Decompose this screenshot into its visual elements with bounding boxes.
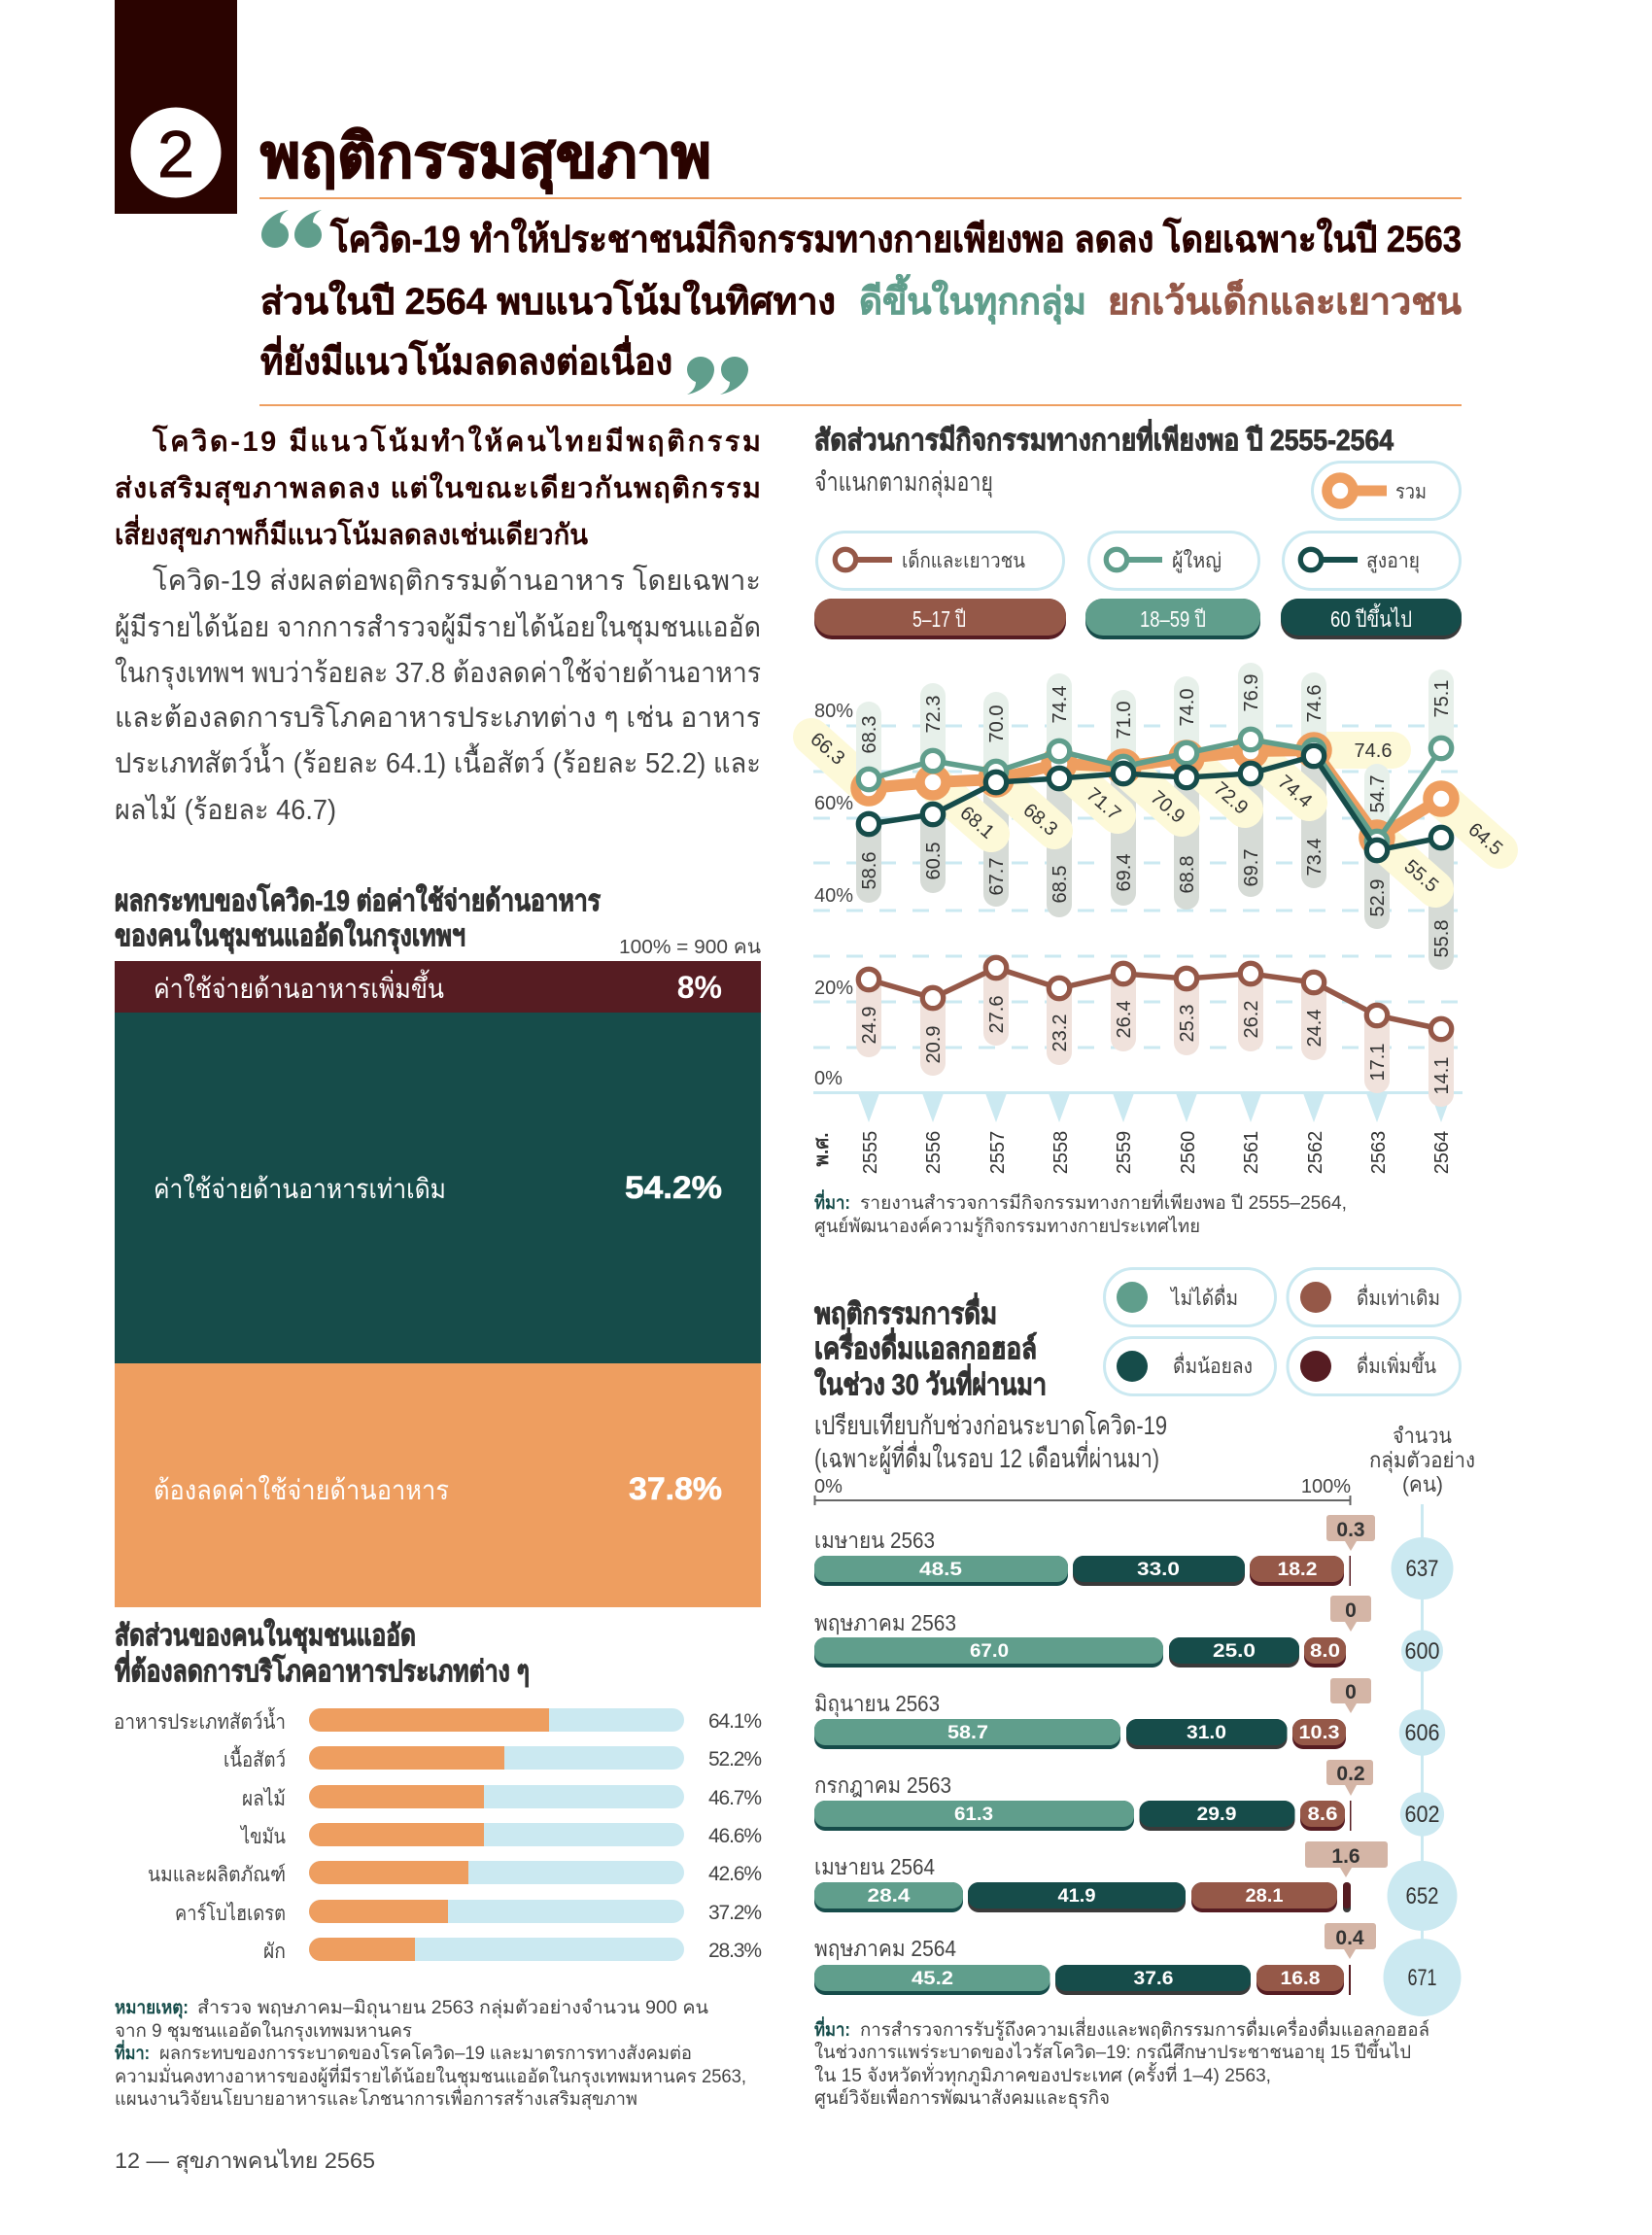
legend: adults — [1088, 533, 1259, 589]
row: May 2564: 45.2 — [912, 1969, 953, 1989]
total value capsules — [811, 737, 1499, 889]
row: April 2564: 652 — [1405, 1883, 1438, 1909]
notes and source: left column: ที่มา: — [115, 2040, 150, 2064]
row: June 2563: มิถุนายน 2563 — [814, 1691, 940, 1717]
x axis year labels: 2555 — [860, 1131, 881, 1174]
heading: food expense impact: ของคนในชุมชนแออัดในกรุงเทพฯ — [115, 918, 465, 954]
children values — [859, 996, 1453, 1094]
adult values: 74.6 — [1304, 685, 1325, 722]
subheading: comparison: (เฉพาะผู้ที่ดื่มในรอบ 12 เดือนที่ผ่านมา) — [814, 1440, 1159, 1474]
row: May 2563: พฤษภาคม 2563 — [814, 1610, 956, 1635]
subheading: comparison: เปรียบเทียบกับช่วงก่อนระบาดโควิด-19 — [814, 1411, 1167, 1440]
heading: alcohol behaviour: เครื่องดื่มแอลกอฮอล์ — [814, 1327, 1037, 1365]
x axis year labels: พ.ศ. — [811, 1133, 833, 1166]
x axis year labels: 2559 — [1114, 1131, 1135, 1174]
elderly values: 68.8 — [1177, 856, 1198, 893]
total values: 64.5 — [1463, 819, 1506, 860]
x axis year labels: 2558 — [1050, 1131, 1072, 1174]
block: increased 8%: ค่าใช้จ่ายด้านอาหารเพิ่มขึ้น — [154, 969, 444, 1004]
adult values: 76.9 — [1241, 674, 1262, 711]
block: same 54.2%: ค่าใช้จ่ายด้านอาหารเท่าเดิม — [154, 1173, 446, 1204]
row: July 2563: กรกฎาคม 2563 — [814, 1772, 951, 1798]
row: fat: ไขมัน — [239, 1825, 286, 1848]
heading: alcohol behaviour — [814, 1292, 1047, 1401]
sample size header: จำนวน — [1393, 1424, 1452, 1448]
legend: total: รวม — [1395, 481, 1427, 503]
row: May 2563: 67.0 — [970, 1641, 1009, 1662]
body paragraph: โควิด-19 ส่งผลต่อพฤติกรรมด้านอาหาร โดยเฉพาะ — [153, 564, 761, 597]
percent scale axis: 100% — [1301, 1476, 1351, 1497]
notes and source: left column — [115, 1998, 746, 2111]
row: June 2563: 606 — [1405, 1720, 1440, 1746]
heading: alcohol behaviour: ในช่วง 30 วันที่ผ่านมา — [814, 1363, 1047, 1401]
row: dairy: 42.6% — [708, 1863, 762, 1885]
total values — [806, 729, 1506, 897]
children values: 23.2 — [1050, 1014, 1071, 1051]
legend: drinking more — [1288, 1337, 1460, 1395]
row: fruit: ผลไม้ — [242, 1787, 286, 1810]
row: June 2563: 10.3 — [1298, 1723, 1339, 1743]
row: July 2563 — [814, 1760, 1444, 1837]
children values: 14.1 — [1431, 1057, 1453, 1094]
row: fat — [239, 1823, 762, 1848]
legend: not drinking — [1104, 1269, 1275, 1325]
row: seafood — [114, 1707, 762, 1734]
age pill: 5-17: 5–17 ปี — [912, 606, 966, 632]
row: May 2564 — [814, 1923, 1462, 2016]
icon: closing quote mark — [687, 357, 748, 395]
legend: drinking less: ดื่มน้อยลง — [1173, 1352, 1253, 1378]
percent scale axis — [814, 1476, 1351, 1505]
adult value capsules — [869, 675, 1441, 842]
row: carbohydrate — [175, 1900, 762, 1925]
children values: 24.4 — [1304, 1010, 1325, 1047]
heading: food expense impact — [115, 882, 601, 954]
heading: physical activity: สัดส่วนการมีกิจกรรมทางกายที่เพียงพอ ปี 2555-2564 — [814, 419, 1394, 457]
row: April 2564: เมษายน 2564 — [814, 1854, 935, 1879]
row: meat: 52.2% — [708, 1748, 762, 1771]
adult values: 54.7 — [1367, 775, 1389, 812]
pull quote: ที่ยังมีแนวโน้มลดลงต่อเนื่อง — [260, 335, 672, 383]
notes and source: left column: ความมั่นคงทางอาหารของผู้ที่มีรายได้น้อยในชุมชนแออัดในกรุงเทพมหานคร 2563, — [115, 2063, 746, 2088]
body paragraph — [115, 564, 761, 826]
row: May 2564: 0.4 — [1335, 1927, 1364, 1949]
row: April 2563: 48.5 — [919, 1560, 963, 1580]
elderly values: 68.5 — [1050, 866, 1071, 903]
row: April 2563: 18.2 — [1277, 1560, 1318, 1580]
percent scale axis: 0% — [814, 1476, 843, 1497]
heading: food types — [115, 1618, 530, 1688]
y axis labels: 0% — [814, 1068, 843, 1089]
total values: 55.5 — [1399, 856, 1442, 897]
children values: 17.1 — [1367, 1044, 1389, 1081]
legend: elderly — [1283, 533, 1460, 589]
row: seafood: 64.1% — [708, 1710, 762, 1733]
intro bold paragraph: เสี่ยงสุขภาพก็มีแนวโน้มลดลงเช่นเดียวกัน — [115, 514, 588, 552]
source: physical activity: ที่มา: — [814, 1189, 850, 1214]
legend: children and youth — [816, 533, 1063, 589]
row: vegetables — [263, 1938, 762, 1963]
block: same 54.2% — [115, 1013, 761, 1363]
total values: 68.1 — [955, 803, 998, 843]
adult values: 70.0 — [986, 705, 1008, 742]
header: section number tab: 2 — [157, 118, 194, 191]
source: alcohol: ในช่วงการแพร่ระบาดของไวรัสโควิด–19: กรณีศึกษาประชาชนอายุ 15 ปีขึ้นไป — [814, 2039, 1411, 2064]
row: May 2564: 37.6 — [1133, 1969, 1174, 1989]
block: reduced 37.8%: ต้องลดค่าใช้จ่ายด้านอาหาร — [154, 1474, 449, 1505]
total values: 68.3 — [1018, 800, 1061, 841]
row: June 2563 — [814, 1678, 1445, 1756]
sample size header: (คน) — [1402, 1472, 1443, 1496]
row: April 2564: 41.9 — [1057, 1886, 1096, 1907]
line: elderly — [858, 745, 1452, 861]
row: July 2563: 61.3 — [954, 1805, 993, 1825]
source: alcohol: การสำรวจการรับรู้ถึงความเสี่ยงและพฤติกรรมการดื่มเครื่องดื่มแอลกอฮอล์ — [860, 2016, 1429, 2041]
row: July 2563: 29.9 — [1197, 1805, 1236, 1825]
row: fat: 46.6% — [708, 1825, 762, 1847]
legend: same drinking: ดื่มเท่าเดิม — [1357, 1284, 1440, 1310]
heading: food types: ที่ต้องลดการบริโภคอาหารประเภทต่าง ๆ — [115, 1650, 530, 1688]
row: May 2564: 16.8 — [1281, 1969, 1320, 1989]
x axis year labels: 2563 — [1368, 1131, 1390, 1174]
sample size header: กลุ่มตัวอย่าง — [1369, 1448, 1475, 1473]
row: dairy: นมและผลิตภัณฑ์ — [148, 1863, 286, 1886]
adult values — [859, 674, 1453, 812]
intro bold paragraph — [115, 424, 761, 552]
row: May 2563: 25.0 — [1213, 1641, 1256, 1662]
total values: 74.4 — [1273, 772, 1316, 812]
total values: 71.7 — [1082, 784, 1124, 825]
x axis line and ticks — [813, 1091, 1463, 1122]
block: increased 8%: 8% — [677, 970, 722, 1005]
row: April 2563: 637 — [1405, 1556, 1438, 1582]
row: meat — [224, 1745, 762, 1771]
row: carbohydrate: คาร์โบไฮเดรต — [175, 1902, 286, 1925]
total values: 74.6 — [1355, 740, 1392, 762]
notes and source: left column: สำรวจ พฤษภาคม–มิถุนายน 2563 กลุ่มตัวอย่างจำนวน 900 คน — [197, 1998, 708, 2019]
source: alcohol: ที่มา: — [814, 2016, 850, 2041]
total values: 70.9 — [1146, 787, 1188, 828]
row: July 2563: 602 — [1405, 1802, 1440, 1828]
y axis labels: 60% — [814, 793, 853, 814]
body paragraph: ประเภทสัตว์น้ำ (ร้อยละ 64.1) เนื้อสัตว์ (ร้อยละ 52.2) และ — [115, 742, 761, 779]
sample size connector — [1421, 1504, 1424, 1943]
row: April 2564: 1.6 — [1331, 1845, 1360, 1868]
row: vegetables: 28.3% — [708, 1940, 762, 1962]
sample size header — [1369, 1424, 1475, 1496]
legend: children and youth: เด็กและเยาวชน — [902, 547, 1025, 572]
x axis year labels: 2561 — [1241, 1131, 1262, 1174]
row: June 2563: 0 — [1345, 1681, 1357, 1703]
x axis year labels — [811, 1131, 1453, 1174]
notes and source: left column: หมายเหตุ: — [115, 1998, 189, 2019]
x axis year labels: 2557 — [987, 1131, 1009, 1174]
header: section number tab — [115, 0, 237, 214]
elderly value capsules — [869, 756, 1441, 957]
heading: alcohol behaviour: พฤติกรรมการดื่ม — [814, 1292, 997, 1330]
pull quote: ส่วนในปี 2564 พบแนวโน้มในทิศทาง — [260, 279, 836, 323]
page footer: 12 — สุขภาพคนไทย 2565 — [115, 2149, 375, 2174]
title: พฤติกรรมสุขภาพ — [260, 123, 711, 193]
row: April 2563: 0.3 — [1336, 1519, 1365, 1541]
total values: 66.3 — [806, 729, 848, 770]
row: April 2563: เมษายน 2563 — [814, 1528, 935, 1553]
block: increased 8% — [115, 961, 761, 1013]
y axis labels — [814, 701, 853, 1089]
scale note: 100% = 900 คน — [619, 937, 761, 958]
source: physical activity — [814, 1189, 1347, 1237]
source: alcohol: ศูนย์วิจัยเพื่อการพัฒนาสังคมและธุรกิจ — [814, 2084, 1110, 2110]
elderly values: 69.4 — [1114, 854, 1135, 891]
icon: opening quote mark — [261, 210, 322, 248]
children values: 25.3 — [1177, 1005, 1198, 1042]
adult values: 74.4 — [1050, 686, 1071, 723]
block: reduced 37.8%: 37.8% — [629, 1471, 722, 1506]
elderly values: 60.5 — [923, 842, 945, 879]
chart: alcohol stacked bars — [814, 1515, 1462, 2016]
row: April 2564 — [814, 1841, 1458, 1931]
row: May 2563 — [814, 1596, 1443, 1671]
row: fruit — [242, 1785, 762, 1810]
children values: 24.9 — [859, 1007, 880, 1044]
age pill: 60+: 60 ปีขึ้นไป — [1330, 603, 1412, 632]
elderly values: 55.8 — [1431, 920, 1453, 957]
elderly values: 58.6 — [859, 852, 880, 889]
intro bold paragraph: ส่งเสริมสุขภาพลดลง แต่ในขณะเดียวกันพฤติกรรม — [115, 471, 761, 505]
children value capsules — [869, 968, 1441, 1094]
block: reduced 37.8% — [115, 1363, 761, 1607]
notes and source: left column: จาก 9 ชุมชนแออัดในกรุงเทพมหานคร — [115, 2020, 412, 2043]
elderly values: 67.7 — [986, 858, 1008, 895]
age pill: 60+ — [1281, 599, 1462, 639]
chart: stacked food expense blocks — [115, 961, 761, 1607]
row: July 2563: 8.6 — [1308, 1805, 1337, 1825]
block: same 54.2%: 54.2% — [625, 1170, 722, 1205]
row: June 2563: 58.7 — [947, 1723, 988, 1743]
legend: total — [1312, 463, 1460, 519]
children values: 20.9 — [923, 1026, 945, 1063]
row: carbohydrate: 37.2% — [708, 1902, 762, 1924]
y axis labels: 20% — [814, 978, 853, 999]
row: April 2564: 28.4 — [867, 1886, 911, 1907]
notes and source: left column: ผลกระทบของการระบาดของโรคโควิด–19 และมาตรการทางสังคมต่อ — [159, 2042, 692, 2064]
pull quote — [260, 210, 1462, 395]
legend: adults: ผู้ใหญ่ — [1172, 549, 1222, 573]
source: alcohol — [814, 2016, 1429, 2110]
legend: elderly: สูงอายุ — [1366, 550, 1420, 573]
line: children — [858, 957, 1452, 1040]
age pill: 5-17 — [814, 599, 1066, 639]
source: alcohol: ใน 15 จังหวัดทั่วทุกภูมิภาคของประเทศ (ครั้งที่ 1–4) 2563, — [814, 2062, 1271, 2087]
legend: drinking more: ดื่มเพิ่มขึ้น — [1357, 1352, 1436, 1378]
pull quote: โควิด-19 ทำให้ประชาชนมีกิจกรรมทางกายเพียงพอ ลดลง โดยเฉพาะในปี 2563 — [329, 217, 1462, 260]
chart: physical activity line chart — [806, 674, 1506, 1174]
pull quote: ยกเว้นเด็กและเยาวชน — [1108, 279, 1462, 323]
heading: food expense impact: ผลกระทบของโควิด-19 ต่อค่าใช้จ่ายด้านอาหาร — [115, 882, 601, 917]
source: physical activity: รายงานสำรวจการมีกิจกรรมทางกายที่เพียงพอ ปี 2555–2564, — [860, 1189, 1347, 1214]
body paragraph: และต้องลดการบริโภคอาหารประเภทต่าง ๆ เช่น อาหาร — [115, 701, 761, 734]
row: July 2563: 0.2 — [1336, 1763, 1365, 1785]
row: May 2563: 600 — [1405, 1638, 1440, 1665]
row: May 2563: 8.0 — [1310, 1641, 1340, 1662]
legend: not drinking: ไม่ได้ดื่ม — [1169, 1284, 1238, 1310]
row: May 2563: 0 — [1345, 1599, 1357, 1622]
row: seafood: อาหารประเภทสัตว์น้ำ — [114, 1707, 286, 1734]
row: April 2563: 33.0 — [1137, 1560, 1180, 1580]
row: June 2563: 31.0 — [1187, 1723, 1226, 1743]
row: fruit: 46.7% — [708, 1787, 762, 1809]
row: meat: เนื้อสัตว์ — [224, 1745, 286, 1771]
y axis labels: 80% — [814, 701, 853, 722]
children values: 27.6 — [986, 996, 1008, 1033]
source: physical activity: ศูนย์พัฒนาองค์ความรู้กิจกรรมทางกายประเทศไทย — [814, 1216, 1200, 1237]
row: April 2564: 28.1 — [1246, 1886, 1284, 1907]
chart: food type reduction bars — [114, 1707, 762, 1963]
legend: drinking less — [1104, 1337, 1275, 1395]
total values: 72.9 — [1209, 778, 1252, 819]
elderly values: 73.4 — [1304, 839, 1325, 876]
elderly values — [859, 839, 1453, 957]
line: total — [855, 737, 1454, 851]
row: dairy — [148, 1861, 762, 1886]
adult values: 75.1 — [1431, 680, 1453, 717]
x axis year labels: 2560 — [1178, 1131, 1199, 1174]
row: vegetables: ผัก — [263, 1941, 286, 1963]
subheading: comparison — [814, 1411, 1167, 1474]
children values: 26.2 — [1241, 1001, 1262, 1038]
age pill: 18-59 — [1085, 599, 1260, 639]
adult values: 72.3 — [923, 696, 945, 733]
children values: 26.4 — [1114, 1001, 1135, 1038]
notes and source: left column: แผนงานวิจัยนโยบายอาหารและโภชนาการเพื่อการสร้างเสริมสุขภาพ — [115, 2085, 637, 2111]
elderly values: 69.7 — [1241, 849, 1262, 886]
elderly values: 52.9 — [1367, 879, 1389, 916]
adult values: 68.3 — [859, 716, 880, 753]
body paragraph: ผู้มีรายได้น้อย จากการสำรวจผู้มีรายได้น้อยในชุมชนแออัด — [115, 610, 761, 644]
pull quote: ดีขึ้นในทุกกลุ่ม — [859, 274, 1086, 325]
subheading: by age group: จำแนกตามกลุ่มอายุ — [814, 467, 993, 499]
legend: same drinking — [1288, 1269, 1460, 1325]
row: May 2564: 671 — [1407, 1965, 1436, 1991]
age pill: 18-59: 18–59 ปี — [1140, 606, 1206, 632]
y axis labels: 40% — [814, 885, 853, 907]
row: April 2563 — [814, 1515, 1454, 1599]
adult values: 71.0 — [1114, 702, 1135, 739]
row: May 2564: พฤษภาคม 2564 — [814, 1936, 956, 1961]
x axis year labels: 2556 — [923, 1131, 945, 1174]
intro bold paragraph: โควิด-19 มีแนวโน้มทำให้คนไทยมีพฤติกรรม — [152, 424, 761, 458]
x axis year labels: 2562 — [1305, 1131, 1326, 1174]
line: adults — [858, 729, 1452, 852]
heading: food types: สัดส่วนของคนในชุมชนแออัด — [115, 1618, 416, 1654]
body paragraph: ในกรุงเทพฯ พบว่าร้อยละ 37.8 ต้องลดค่าใช้จ่ายด้านอาหาร — [115, 656, 761, 690]
adult values: 74.0 — [1177, 689, 1198, 726]
body paragraph: ผลไม้ (ร้อยละ 46.7) — [115, 793, 336, 826]
x axis year labels: 2564 — [1431, 1131, 1453, 1174]
